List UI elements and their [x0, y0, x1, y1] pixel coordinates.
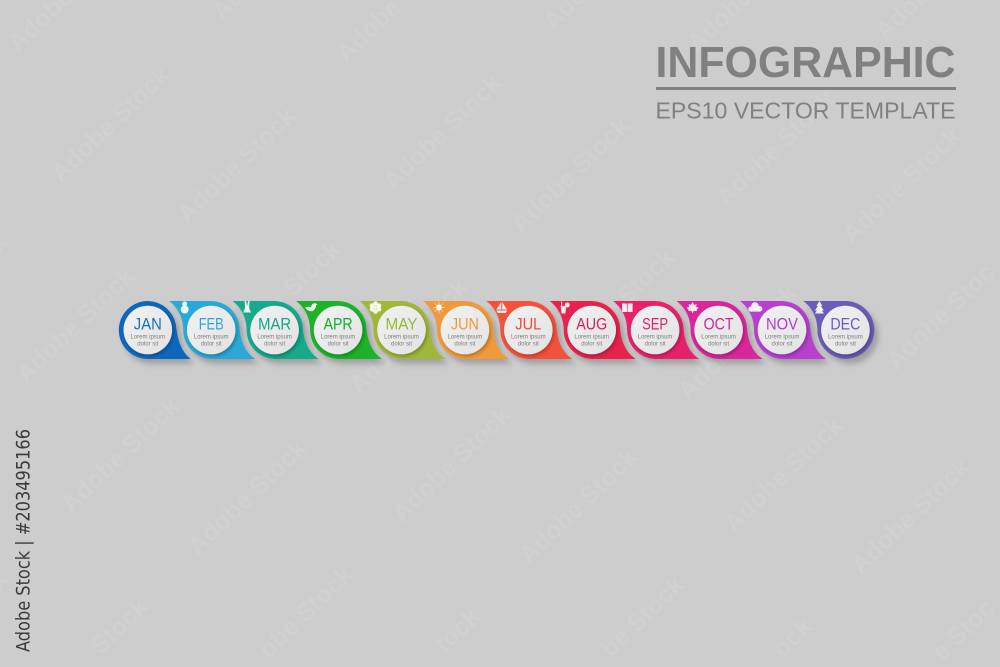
step: NOV: Lorem ipsum [765, 335, 799, 341]
step: OCT: OCT [704, 315, 734, 333]
watermarks: Adobe Stock [846, 453, 975, 579]
step: MAR: dolor sit [264, 342, 285, 348]
icon: cloud [748, 302, 762, 312]
step: AUG: Lorem ipsum [574, 335, 609, 341]
step: SEP: SEP [642, 315, 668, 333]
step: JUL [486, 301, 572, 359]
step: DEC: Lorem ipsum [828, 335, 863, 341]
step: JUN: dolor sit [454, 342, 476, 348]
watermarks: Adobe Stock [56, 392, 185, 518]
watermarks: Adobe Stock [11, 262, 140, 388]
step: MAR [233, 301, 319, 359]
step: JAN [119, 301, 191, 359]
step: FEB: Lorem ipsum [194, 335, 229, 341]
step: FEB: FEB [199, 315, 224, 333]
step: OCT [677, 301, 763, 359]
watermarks: be Stock [595, 571, 690, 663]
step: AUG: AUG [576, 315, 607, 333]
step: JUN: JUN [451, 315, 479, 333]
watermarks: Adobe Stock [719, 411, 848, 537]
step: JUL: JUL [515, 315, 541, 333]
watermarks: Adobe Stoc [881, 259, 1000, 375]
watermarks: Adobe Stock [387, 401, 516, 527]
watermarks: Adobe Stock [711, 85, 840, 211]
title: INFOGRAPHIC [656, 38, 956, 87]
icon: snowman [181, 302, 189, 314]
step: JAN: dolor sit [137, 342, 159, 348]
step: MAR: MAR [258, 315, 291, 333]
subtitle: EPS10 VECTOR TEMPLATE [656, 98, 956, 124]
watermarks: tock [429, 603, 486, 659]
step: NOV [740, 301, 826, 359]
title rule [656, 87, 956, 90]
step: JUN [423, 301, 509, 359]
icon: sun [433, 302, 445, 314]
step: APR: APR [324, 315, 353, 333]
step: JAN: Lorem ipsum [130, 335, 165, 341]
stock id: Adobe Stock | #203495166 [14, 429, 34, 652]
step: JUL: Lorem ipsum [511, 335, 546, 341]
step: FEB [169, 301, 255, 359]
step: OCT: Lorem ipsum [701, 335, 736, 341]
icon: sailboat [496, 302, 507, 313]
step: JUL: dolor sit [518, 342, 539, 348]
step: MAR: Lorem ipsum [257, 335, 292, 341]
step: SEP: dolor sit [645, 342, 666, 348]
icon: rabbit [243, 301, 251, 312]
step: JUN: Lorem ipsum [448, 335, 482, 341]
watermarks: ock [767, 613, 818, 663]
step: MAY: dolor sit [391, 342, 412, 348]
icon: cocktail [561, 302, 570, 314]
watermarks: Adobe Stock [344, 273, 473, 399]
watermarks: Adobe Stock [46, 61, 175, 187]
step: NOV: NOV [766, 315, 798, 333]
icon: pine tree [815, 301, 824, 314]
step: OCT: dolor sit [708, 342, 729, 348]
watermarks: Stock [85, 593, 154, 660]
step: DEC: DEC [830, 315, 860, 333]
watermarks: Adobe Stock [837, 122, 966, 248]
step: JAN: JAN [134, 315, 162, 333]
step: DEC: dolor sit [835, 342, 856, 348]
watermarks: Adobe Stock [514, 443, 643, 569]
watermarks: e Stoc [927, 594, 1000, 666]
step: SEP [613, 301, 699, 359]
step: AUG [550, 301, 636, 359]
watermarks: Adobe Stock [378, 69, 507, 195]
step: MAY: MAY [386, 315, 418, 333]
step: MAY: Lorem ipsum [384, 335, 419, 341]
icon: maple leaf [687, 302, 699, 314]
watermarks: Adobe Stock [506, 112, 635, 238]
step: DEC [803, 301, 874, 359]
step: NOV: dolor sit [771, 342, 793, 348]
step: SEP: Lorem ipsum [638, 335, 672, 341]
icon: flower [370, 301, 381, 314]
watermarks: obe Stock [253, 561, 359, 664]
step: APR [296, 301, 382, 359]
icon: bird [305, 303, 318, 311]
watermarks: Adobe Stock [183, 434, 312, 560]
watermarks: Adobe Stock [217, 235, 346, 361]
step: APR: dolor sit [328, 342, 349, 348]
step: AUG: dolor sit [581, 342, 603, 348]
step: MAY [360, 301, 446, 359]
icon: book [622, 304, 633, 312]
step: FEB: dolor sit [201, 342, 222, 348]
watermarks: Adobe Stock [673, 279, 802, 405]
step: APR: Lorem ipsum [321, 335, 355, 341]
timeline [119, 301, 874, 359]
watermarks: Adobe Stock [172, 102, 301, 228]
watermarks: Adobe Stock [551, 243, 680, 369]
